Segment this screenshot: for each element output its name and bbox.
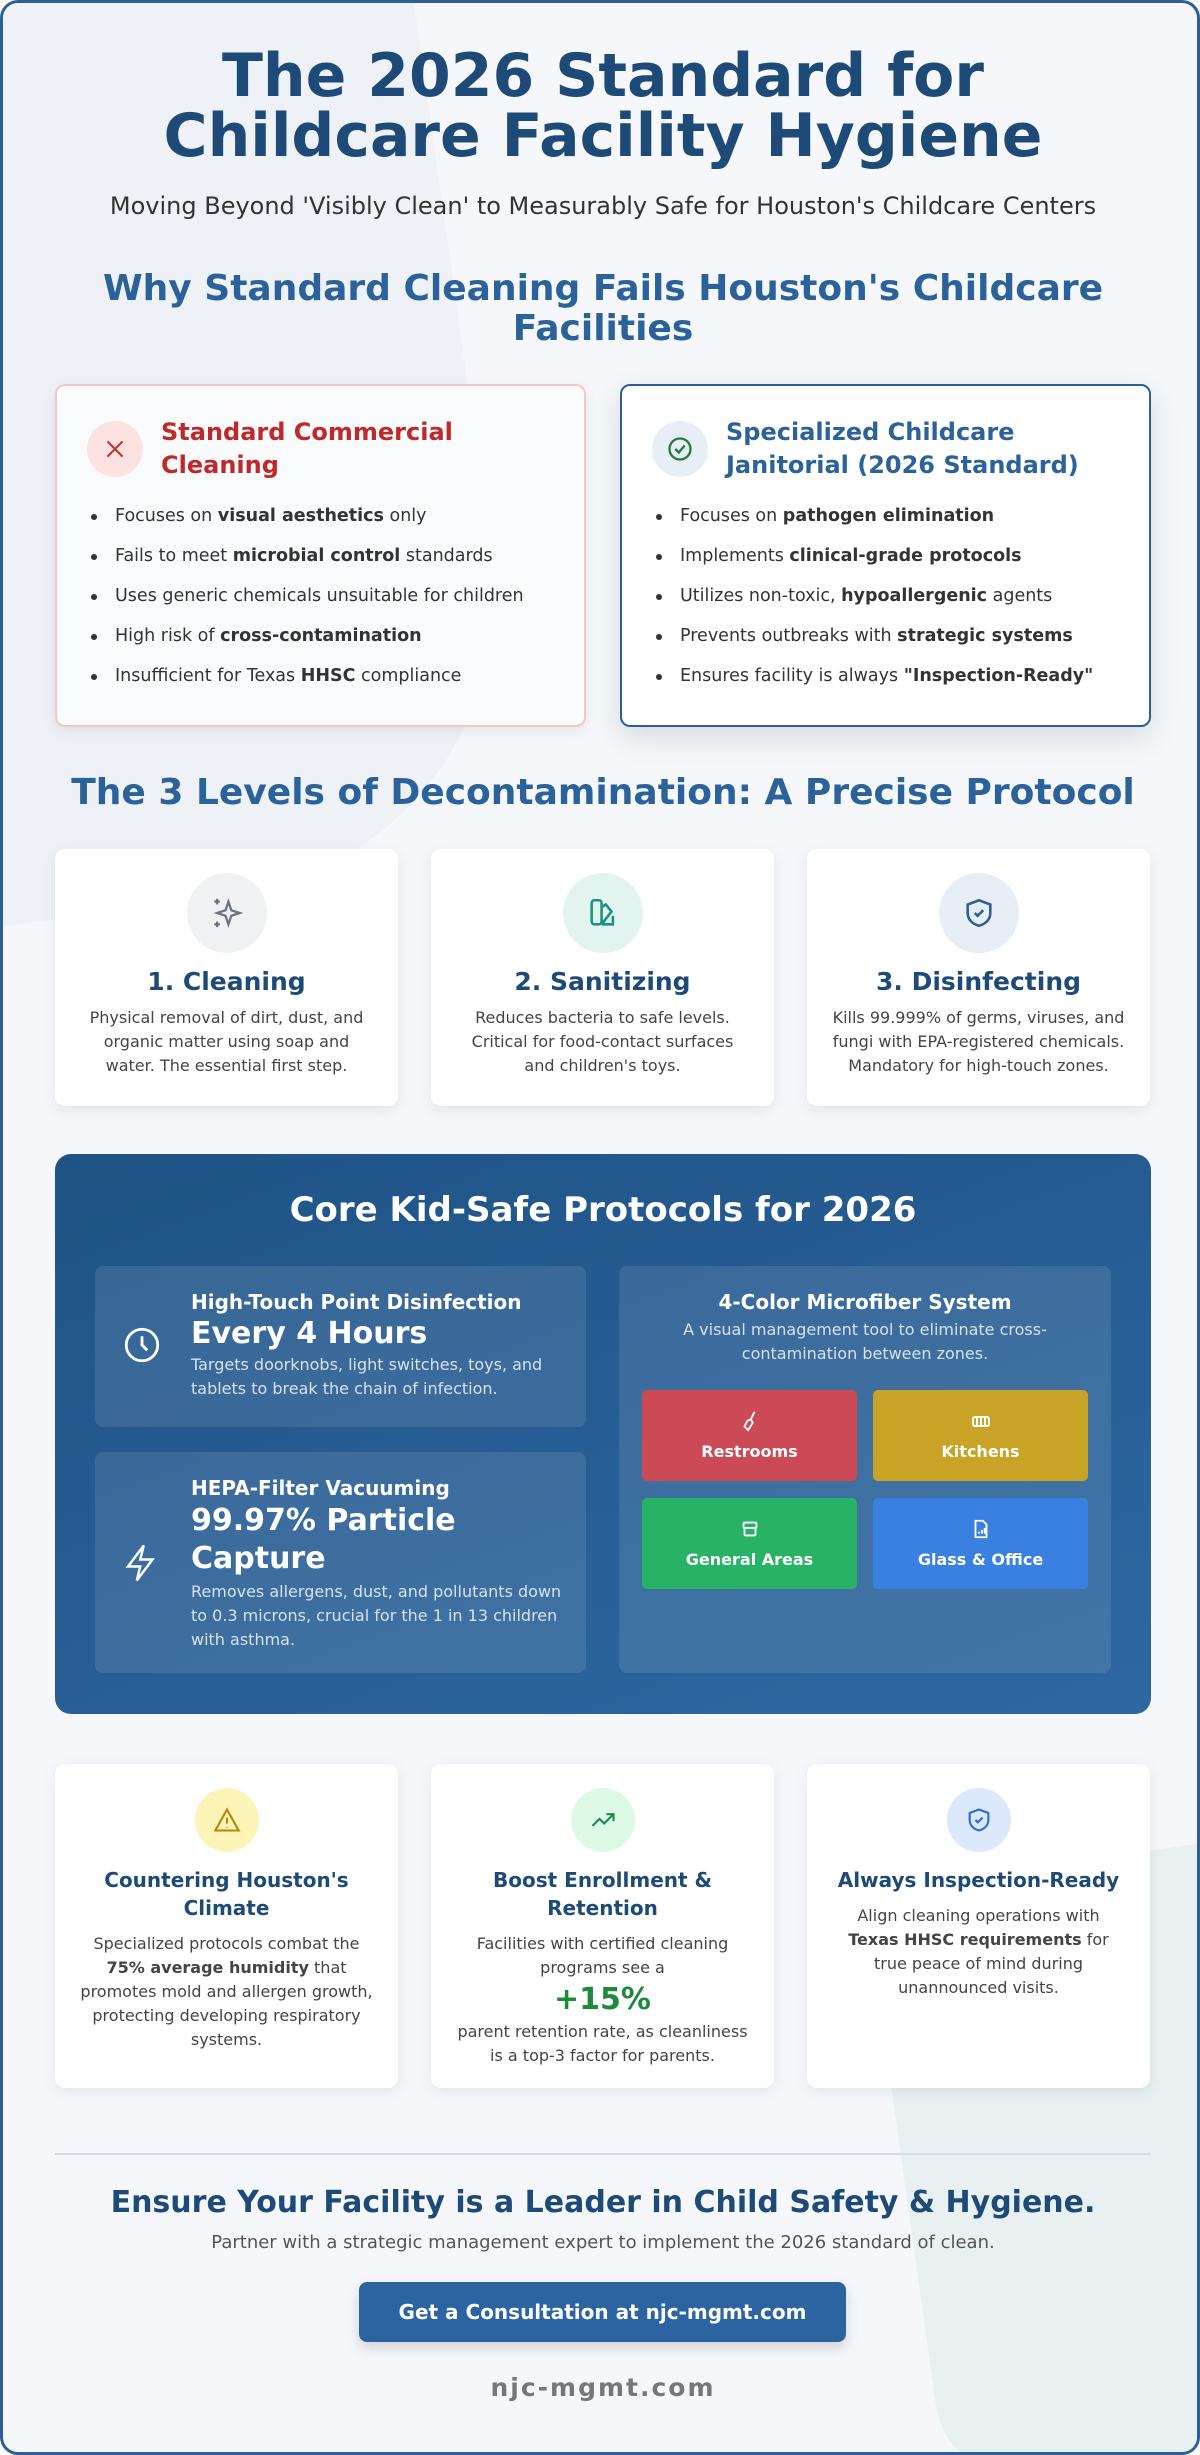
icon: check bbox=[652, 421, 708, 477]
box: high-touch disinfection bbox=[95, 1266, 586, 1427]
list: standard issues: Uses generic chemicals unsuitable for children bbox=[115, 586, 524, 606]
list: standard issues bbox=[91, 506, 524, 686]
subtitle: Moving Beyond 'Visibly Clean' to Measurably Safe for Houston's Childcare Centers bbox=[110, 192, 1096, 220]
heading: why standard cleaning fails: Facilities bbox=[513, 308, 693, 349]
box: high-touch disinfection: Targets doorknobs, light switches, toys, and tablets to break the chain of infection. bbox=[191, 1355, 542, 1398]
icon: shield check bbox=[946, 1788, 1010, 1852]
header: specialized: Janitorial (2026 Standard) bbox=[726, 451, 1079, 479]
list: specialized benefits: Implements clinical-grade protocols bbox=[680, 546, 1022, 566]
header: standard bbox=[87, 418, 453, 479]
card: enrollment: +15% bbox=[554, 1982, 651, 2017]
card: inspection-ready bbox=[807, 1764, 1150, 2088]
icon: lightning bbox=[126, 1544, 155, 1582]
box: high-touch disinfection: Every 4 Hours bbox=[191, 1316, 427, 1351]
header: specialized: Specialized Childcare bbox=[726, 418, 1014, 446]
tile: restrooms: Restrooms bbox=[701, 1442, 798, 1461]
card: disinfecting bbox=[807, 849, 1150, 1106]
CTA button bbox=[359, 2282, 846, 2342]
panel: specialized childcare janitorial bbox=[620, 384, 1151, 727]
box: HEPA vacuuming: Removes allergens, dust, and pollutants down to 0.3 microns, crucial for the 1 in 13 children with asthma. bbox=[191, 1582, 561, 1649]
heading: why standard cleaning fails bbox=[103, 268, 1103, 349]
card: disinfecting: 3. Disinfecting bbox=[876, 967, 1081, 996]
heading: why standard cleaning fails: Why Standard Cleaning Fails Houston's Childcare bbox=[103, 268, 1103, 309]
icon: warning bbox=[194, 1788, 258, 1852]
card: inspection-ready: Always Inspection-Ready bbox=[838, 1868, 1119, 1892]
list: specialized benefits bbox=[656, 506, 1093, 686]
box: 4-color microfiber system: A visual management tool to eliminate cross-contamination between zones. bbox=[683, 1320, 1047, 1363]
list: specialized benefits: Ensures facility is always "Inspection-Ready" bbox=[680, 666, 1093, 686]
card: sanitizing: Reduces bacteria to safe levels. Critical for food-contact surfaces and children's toys. bbox=[472, 1008, 733, 1075]
icon: sparkle bbox=[186, 873, 266, 953]
card: enrollment: parent retention rate, as cleanliness is a top-3 factor for parents. bbox=[457, 2022, 748, 2065]
list: standard issues: Focuses on visual aesthetics only bbox=[115, 506, 427, 526]
card: enrollment bbox=[431, 1764, 774, 2088]
title bbox=[164, 41, 1042, 171]
card: cleaning: Physical removal of dirt, dust, and organic matter using soap and water. The essential first step. bbox=[90, 1008, 363, 1075]
header: standard: Standard Commercial bbox=[161, 418, 453, 446]
CTA heading: Ensure Your Facility is a Leader in Child Safety & Hygiene. bbox=[111, 2185, 1095, 2220]
tile: restrooms bbox=[642, 1390, 857, 1481]
box: high-touch disinfection: High-Touch Point Disinfection bbox=[191, 1290, 522, 1314]
list: standard issues: Insufficient for Texas HHSC compliance bbox=[115, 666, 461, 686]
box: 4-color microfiber system bbox=[619, 1266, 1111, 1673]
card: sanitizing: 2. Sanitizing bbox=[514, 967, 691, 996]
tile: kitchens bbox=[873, 1390, 1088, 1481]
card: enrollment: Boost Enrollment & Retention bbox=[493, 1868, 712, 1920]
card: houston climate bbox=[55, 1764, 398, 2088]
list: specialized benefits: Utilizes non-toxic, hypoallergenic agents bbox=[680, 586, 1052, 606]
icon: x bbox=[87, 421, 143, 477]
list: specialized benefits: Prevents outbreaks with strategic systems bbox=[680, 626, 1073, 646]
box: HEPA vacuuming: 99.97% Particle Capture bbox=[191, 1503, 456, 1576]
title: The 2026 Standard for bbox=[222, 41, 984, 111]
box: HEPA vacuuming: HEPA-Filter Vacuuming bbox=[191, 1476, 450, 1500]
panel: standard commercial cleaning bbox=[55, 384, 586, 727]
list: specialized benefits: Focuses on pathogen elimination bbox=[680, 506, 994, 526]
icon: clock bbox=[124, 1328, 160, 1362]
tile: general areas: General Areas bbox=[686, 1550, 813, 1569]
list: standard issues: High risk of cross-contamination bbox=[115, 626, 422, 646]
tile: general areas bbox=[642, 1498, 857, 1589]
card: houston climate: Countering Houston's Climate bbox=[104, 1868, 349, 1920]
heading: core protocols: Core Kid-Safe Protocols for 2026 bbox=[290, 1190, 916, 1230]
tile: glass & office bbox=[873, 1498, 1088, 1589]
icon: shield bbox=[938, 873, 1018, 953]
card: disinfecting: Kills 99.999% of germs, viruses, and fungi with EPA-registered chemicals. Mandatory for high-touch zones. bbox=[833, 1008, 1124, 1075]
header: standard: Cleaning bbox=[161, 451, 279, 479]
card: cleaning bbox=[55, 849, 398, 1106]
header: specialized bbox=[652, 418, 1079, 479]
tile: glass & office: Glass & Office bbox=[918, 1550, 1043, 1569]
footer: njc-mgmt.com bbox=[490, 2373, 716, 2402]
box: 4-color microfiber system: 4-Color Microfiber System bbox=[718, 1290, 1012, 1314]
card: inspection-ready: Align cleaning operations with Texas HHSC requirements for true peace of mind during unannounced visits. bbox=[848, 1906, 1109, 1997]
heading: 3 levels: The 3 Levels of Decontamination: A Precise Protocol bbox=[71, 772, 1135, 813]
card: houston climate: Specialized protocols combat the 75% average humidity that promotes mold and allergen growth, protecting developing respiratory systems. bbox=[80, 1934, 373, 2049]
CTA button: Get a Consultation at njc-mgmt.com bbox=[399, 2300, 806, 2324]
card: cleaning: 1. Cleaning bbox=[147, 967, 306, 996]
panel: core kid-safe protocols bbox=[55, 1154, 1151, 1714]
tile: kitchens: Kitchens bbox=[941, 1442, 1020, 1461]
CTA subtext: Partner with a strategic management expert to implement the 2026 standard of clean. bbox=[211, 2232, 995, 2253]
card: sanitizing bbox=[431, 849, 774, 1106]
icon: trend up bbox=[570, 1788, 634, 1852]
box: HEPA vacuuming bbox=[95, 1452, 586, 1673]
card: enrollment: Facilities with certified cleaning programs see a bbox=[477, 1934, 728, 1977]
list: standard issues: Fails to meet microbial control standards bbox=[115, 546, 493, 566]
icon: swatches bbox=[562, 873, 642, 953]
title: Childcare Facility Hygiene bbox=[164, 101, 1042, 171]
